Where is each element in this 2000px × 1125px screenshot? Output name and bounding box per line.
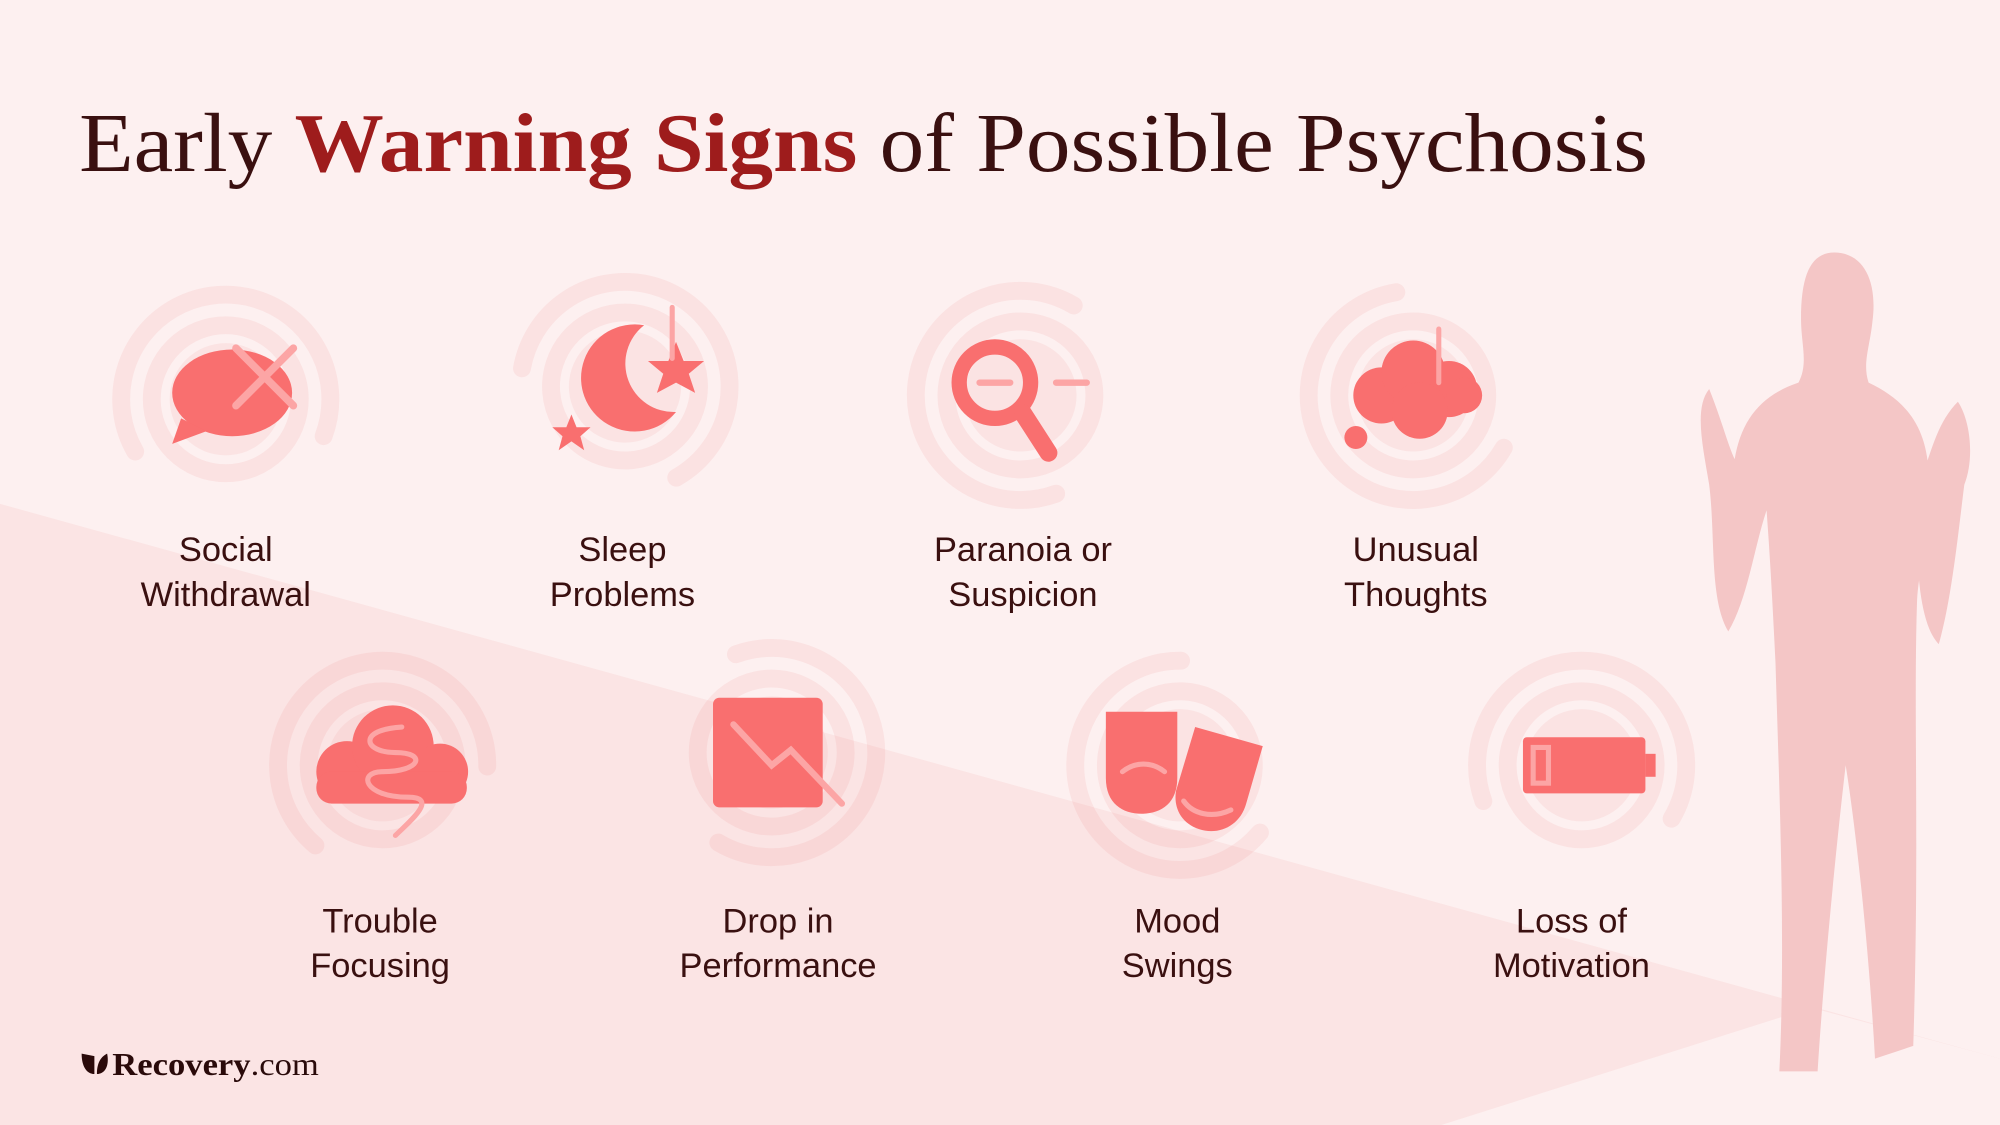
label: Unusual Thoughts: Unusual: [1353, 531, 1479, 569]
label: Drop in Performance: Drop in: [723, 902, 834, 940]
logo: Recovery .com: [112, 1047, 319, 1082]
icon item: Trouble Focusing: [200, 582, 566, 948]
icon item: Sleep Problems: [424, 185, 826, 588]
icon item: Drop in Performance: [606, 587, 937, 918]
icon item: Social Withdrawal: [83, 256, 369, 542]
label: Sleep Problems: Sleep: [578, 531, 666, 569]
icon item: Loss of Motivation: [1416, 600, 1747, 931]
label: Mood Swings: Swings: [1122, 947, 1233, 985]
label: Unusual Thoughts: Thoughts: [1344, 576, 1488, 614]
label: Mood Swings: Mood: [1134, 902, 1220, 940]
label: Loss of Motivation: Motivation: [1493, 947, 1650, 985]
label: Loss of Motivation: Loss of: [1516, 902, 1627, 940]
silhouette: [1701, 253, 1970, 1071]
label: Sleep Problems: Problems: [550, 576, 695, 614]
label: Trouble Focusing: Focusing: [310, 947, 450, 985]
label: Paranoia: Paranoia or: [934, 531, 1112, 569]
icon item: Mood Swings: [997, 582, 1363, 948]
label: Drop in Performance: Performance: [680, 947, 877, 985]
title: Early Warning Signs of Possible Psychosis: [79, 97, 1648, 190]
label: Trouble Focusing: Trouble: [322, 902, 438, 940]
label: Paranoia: Suspicion: [948, 576, 1098, 614]
icon item: Paranoia: [855, 230, 1186, 561]
label: Social Withdrawal: Withdrawal: [141, 576, 311, 614]
icon item: Unusual Thoughts: [1218, 200, 1608, 591]
label: Social Withdrawal: Social: [179, 531, 273, 569]
